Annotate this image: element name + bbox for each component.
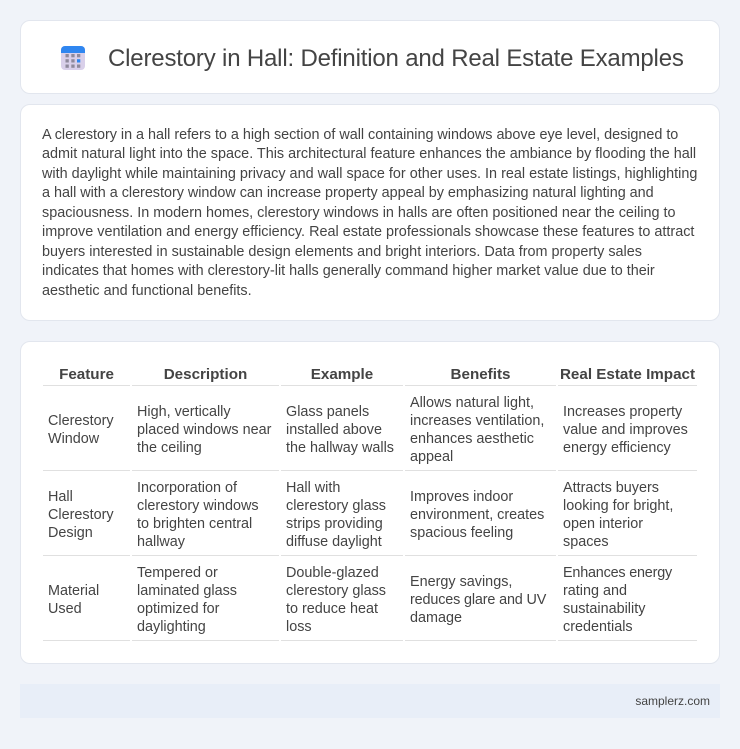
row: material used: daylighting	[137, 619, 206, 635]
row: hall clerestory design: hallway	[137, 534, 185, 550]
row: hall clerestory design: clerestory windows	[137, 498, 259, 514]
table header: Example	[311, 366, 373, 383]
row: hall clerestory design: Hall	[48, 489, 73, 505]
row: hall clerestory design: to brighten central	[137, 516, 252, 532]
row: hall clerestory design: Clerestory	[48, 507, 114, 523]
table header: Feature	[59, 366, 114, 383]
row: hall clerestory design: Improves indoor	[410, 489, 513, 505]
row: hall clerestory design: spaces	[563, 534, 609, 550]
row: hall clerestory design: open interior	[563, 516, 643, 532]
header card	[20, 20, 720, 94]
row: hall clerestory design: Attracts buyers	[563, 480, 659, 496]
row: hall clerestory design: looking for bright,	[563, 498, 673, 514]
row: clerestory window: enhances aesthetic	[410, 431, 534, 447]
row: hall clerestory design: Design	[48, 525, 93, 541]
row: material used: loss	[286, 619, 312, 635]
intro text: with daylight while maintaining privacy and wall space for other uses. In real estate listings, highlighting	[42, 166, 697, 182]
row: material used: rating and	[563, 583, 627, 599]
row: clerestory window: value and improves	[563, 422, 688, 438]
intro text: indicates that homes with clerestory-lit halls generally command higher market value due to their	[42, 263, 655, 279]
row: clerestory window: Clerestory	[48, 413, 114, 429]
row: material used: Energy savings,	[410, 574, 512, 590]
row: clerestory window: the hallway walls	[286, 440, 394, 456]
row: hall clerestory design: Incorporation of	[137, 480, 237, 496]
intro text: admit natural light into the space. This architectural feature enhances the ambiance by flooding the hall	[42, 146, 696, 162]
row: clerestory window: Increases property	[563, 404, 682, 420]
table header: Description	[164, 366, 247, 383]
intro text: aesthetic and functional benefits.	[42, 283, 252, 299]
row: clerestory window: placed windows near	[137, 422, 271, 438]
row: material used: Used	[48, 601, 82, 617]
row: clerestory window: energy efficiency	[563, 440, 671, 456]
row: material used: Tempered or	[137, 565, 218, 581]
row: clerestory window: the ceiling	[137, 440, 202, 456]
row: hall clerestory design: diffuse daylight	[286, 534, 382, 550]
footer bar	[20, 684, 720, 718]
icon: calendar	[61, 46, 85, 70]
table header: Benefits	[451, 366, 510, 383]
row: material used: clerestory glass	[286, 583, 386, 599]
intro text: A clerestory in a hall refers to a high section of wall containing windows above eye level, designed to	[42, 127, 678, 143]
row: hall clerestory design: strips providing	[286, 516, 383, 532]
intro text: improve ventilation and energy efficiency. Real estate professionals showcase these features to attract	[42, 224, 694, 240]
panel: intro paragraph	[20, 104, 720, 321]
row: clerestory window: High, vertically	[137, 404, 231, 420]
intro text	[42, 127, 697, 299]
row: material used: Double-glazed	[286, 565, 379, 581]
row: clerestory window: Glass panels	[286, 404, 369, 420]
row: material used: Enhances energy	[563, 565, 672, 581]
row: clerestory window: increases ventilation,	[410, 413, 544, 429]
intro text: buyers interested in sustainable design elements and bright interiors. Data from property sales	[42, 244, 642, 260]
row: clerestory window: appeal	[410, 449, 453, 465]
row: clerestory window: installed above	[286, 422, 382, 438]
row: clerestory window: Allows natural light,	[410, 395, 534, 411]
intro text: spaciousness. In modern homes, clerestory windows in halls are often positioned near the ceiling to	[42, 205, 676, 221]
row: material used: laminated glass	[137, 583, 237, 599]
panel: feature table	[20, 341, 720, 664]
row: material used: to reduce heat	[286, 601, 378, 617]
intro text: a hall with a clerestory window can increase property appeal by emphasizing natural lighting and	[42, 185, 654, 201]
title: Clerestory in Hall: Definition and Real Estate Examples	[108, 45, 684, 72]
row: material used: damage	[410, 610, 462, 626]
row: material used: sustainability	[563, 601, 645, 617]
row: hall clerestory design: clerestory glass	[286, 498, 386, 514]
row: hall clerestory design: environment, creates	[410, 507, 544, 523]
row: clerestory window: Window	[48, 431, 99, 447]
footer text: samplerz.com	[635, 694, 710, 708]
row: material used: reduces glare and UV	[410, 592, 546, 608]
row: material used: optimized for	[137, 601, 219, 617]
table header: Real Estate Impact	[560, 366, 695, 383]
row: material used: credentials	[563, 619, 633, 635]
row: material used: Material	[48, 583, 99, 599]
row: hall clerestory design: spacious feeling	[410, 525, 513, 541]
row: hall clerestory design: Hall with	[286, 480, 340, 496]
